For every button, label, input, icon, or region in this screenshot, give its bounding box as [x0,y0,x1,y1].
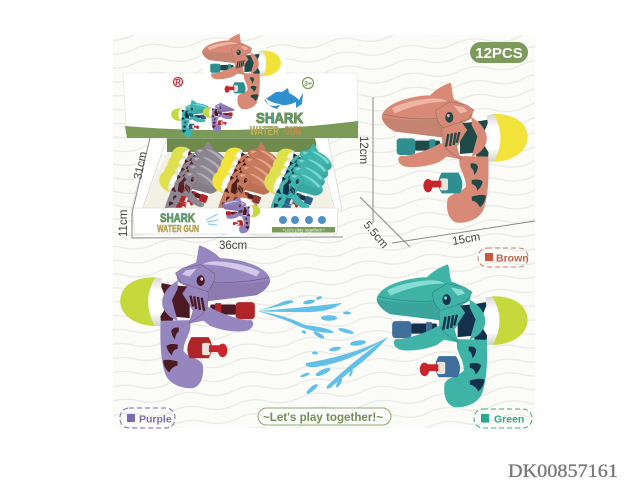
box title: GUN [284,124,301,138]
box interior back [167,136,316,160]
front panel slogan [272,227,335,232]
box front panel [132,208,338,234]
packed guns: teal column [250,132,337,237]
green gun [377,264,528,407]
dimension: 12cm: 12cm [357,136,369,164]
front panel splash [206,214,218,225]
front panel title [157,211,199,235]
water jet: green gun [300,337,388,395]
age badge [302,78,314,88]
front panel slogan: ~Let's play together!~ [282,228,325,232]
box title: SHARK [256,110,303,127]
brand logo [174,78,182,87]
front panel title: WATER GUN [157,224,199,235]
colour label: Purple [120,408,175,428]
packed guns: brown column [198,131,285,236]
product display box [123,34,358,237]
header green band [125,121,358,138]
brown gun [382,83,528,223]
box header card [123,73,358,138]
dimension: 11cm: 11cm [118,210,130,237]
gun dimensions [357,97,535,251]
box right wall [315,138,342,210]
packed guns: grey column [145,130,232,235]
colour label: Green [474,409,532,428]
front panel title: SHARK [160,211,195,225]
badge: 12PCS [470,42,528,63]
water jet: purple gun [257,296,354,340]
box interior floor [140,152,334,210]
purple gun [120,245,270,388]
colour label: Brown [478,248,529,267]
brown gun on top of box [198,34,286,114]
background pattern panel [113,35,535,428]
box title: WATER [250,124,279,138]
icon: blue shark [262,88,303,109]
dimension: 15cm: 15cm [451,231,481,248]
colour label: Brown: Brown [496,252,529,264]
mini purple gun on header [203,100,236,132]
colour label: Green: Green [494,414,524,426]
age badge: 3+ [304,81,312,88]
badge: 12PCS: 12PCS [475,45,523,62]
brand logo: R [175,78,181,87]
feature icons [279,216,326,224]
colour label: Purple: Purple [139,414,172,426]
box dimensions [118,138,343,252]
dimension: 31cm: 31cm [132,151,150,181]
box title [250,110,303,138]
box left wall [131,138,167,210]
dimension: 5.5cm: 5.5cm [361,219,390,251]
dimension: 36cm: 36cm [219,240,247,252]
slogan pill: ~Let's play together!~ [263,410,383,424]
front panel purple gun [222,197,262,236]
mini green gun on header [171,100,210,137]
